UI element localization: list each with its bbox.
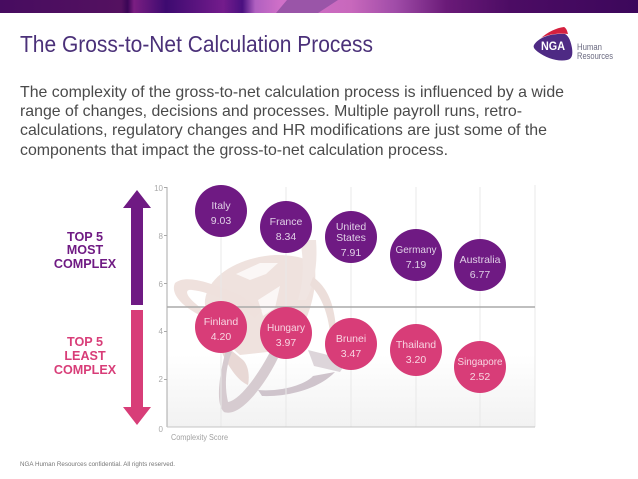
bubble: Italy: Italy xyxy=(211,200,231,212)
bubble: Brunei: 3.47 xyxy=(341,348,361,360)
bubble: United States: 7.91 xyxy=(341,247,361,259)
bubble: Australia xyxy=(454,239,506,291)
bubble: Singapore: Singapore xyxy=(458,356,503,368)
intro paragraph: range of changes, decisions and processes. Multiple payroll runs, retro- xyxy=(20,103,522,120)
footer note: NGA Human Resources confidential. All rights reserved. xyxy=(20,461,175,468)
bubble: Germany: 7.19 xyxy=(406,259,426,271)
chart background xyxy=(167,187,535,427)
bubble: Germany: Germany xyxy=(396,244,437,256)
bubble: Australia: 6.77 xyxy=(470,269,490,281)
label: top 5 least complex xyxy=(54,335,117,377)
logo: NGA Human Resources xyxy=(534,27,613,61)
bubble: United States xyxy=(325,211,377,263)
bubble: France: France xyxy=(270,216,302,228)
bubble: Finland: Finland xyxy=(204,316,238,328)
title: The Gross-to-Net Calculation Process xyxy=(20,31,373,57)
bubble: Finland xyxy=(195,301,247,353)
bubble: Brunei: Brunei xyxy=(336,333,366,345)
label: top 5 least complex: LEAST xyxy=(64,349,106,363)
bubble: Thailand xyxy=(390,324,442,376)
label: top 5 least complex: COMPLEX xyxy=(54,363,117,377)
top banner xyxy=(0,0,638,13)
bubble: Finland: 4.20 xyxy=(211,331,231,343)
label: top 5 most complex: TOP 5 xyxy=(67,230,103,244)
label: top 5 most complex xyxy=(54,230,117,271)
bubble: France: 8.34 xyxy=(276,231,296,243)
axis labels: 4 xyxy=(159,327,164,336)
bubble: Hungary xyxy=(260,307,312,359)
axis labels: 6 xyxy=(159,280,164,289)
axis labels: 2 xyxy=(159,375,164,384)
bubble: Thailand: 3.20 xyxy=(406,354,426,366)
axis labels: 8 xyxy=(159,232,164,241)
label: top 5 least complex: TOP 5 xyxy=(67,335,103,349)
axis labels xyxy=(154,184,164,434)
bubble: United States: States xyxy=(336,232,366,244)
intro paragraph: The complexity of the gross-to-net calculation process is influenced by a wide xyxy=(20,84,564,101)
bubble: Brunei xyxy=(325,318,377,370)
axis labels: 10 xyxy=(154,184,164,193)
bubble: Singapore xyxy=(454,341,506,393)
bubble: Thailand: Thailand xyxy=(396,339,436,351)
chart xyxy=(154,184,535,442)
arrow: most complex (up) xyxy=(123,190,151,305)
logo: NGA Human Resources: Human xyxy=(577,42,602,52)
intro paragraph: calculations, regulatory changes and HR modifications are just some of the xyxy=(20,122,547,139)
intro paragraph xyxy=(20,84,564,159)
bubble: Hungary: 3.97 xyxy=(276,337,296,349)
bubble: Germany xyxy=(390,229,442,281)
bubble: Hungary: Hungary xyxy=(267,322,306,334)
bubble: France xyxy=(260,201,312,253)
bubble: Italy: 9.03 xyxy=(211,215,231,227)
bubble: Australia: Australia xyxy=(460,254,501,266)
label: top 5 most complex: COMPLEX xyxy=(54,257,117,271)
logo: NGA Human Resources: Resources xyxy=(577,51,613,61)
axis title: Complexity Score xyxy=(171,433,229,442)
axis labels: 0 xyxy=(159,425,164,434)
label: top 5 most complex: MOST xyxy=(67,243,103,257)
bubble: Singapore: 2.52 xyxy=(470,371,490,383)
intro paragraph: components that impact the gross-to-net calculation process. xyxy=(20,142,448,159)
bubble: Italy xyxy=(195,185,247,237)
vertical guide lines xyxy=(221,185,535,427)
arrow: least complex (down) xyxy=(123,310,151,425)
midline xyxy=(167,306,535,308)
logo: NGA Human Resources: NGA xyxy=(541,39,565,53)
bubble: United States: United xyxy=(336,221,366,233)
axes xyxy=(164,188,167,427)
globe watermark xyxy=(174,240,348,413)
